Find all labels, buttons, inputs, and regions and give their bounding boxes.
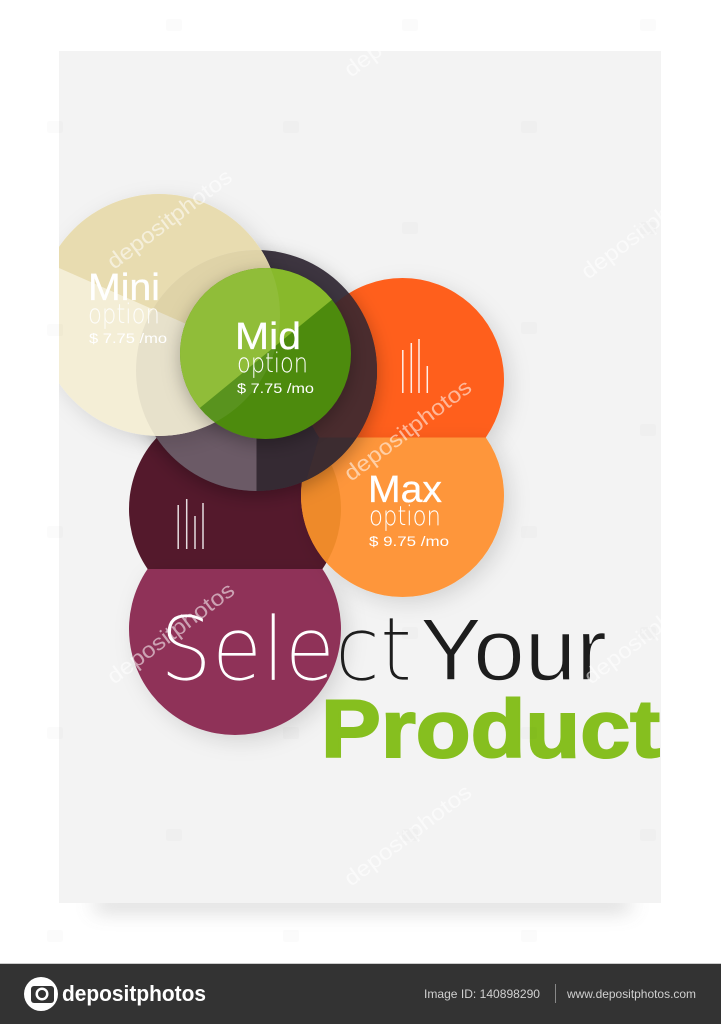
circle: maroon top	[129, 403, 341, 569]
label: max option	[368, 469, 449, 549]
watermarks	[102, 0, 714, 891]
title: product: Product	[321, 684, 660, 775]
watermarks: depositphotos	[102, 164, 237, 274]
footer bar	[0, 963, 721, 1024]
title: select your: Your	[420, 600, 607, 699]
circle: orange top	[301, 278, 504, 438]
logo text: depositphotos	[62, 981, 206, 1006]
label: mini option: option	[88, 299, 160, 330]
watermarks: depositphotos	[579, 579, 714, 689]
label: max option: Max	[368, 469, 442, 511]
label: max option: option	[369, 501, 441, 532]
website: www.depositphotos.com	[566, 987, 696, 1001]
watermark camera marks	[47, 19, 656, 942]
label: mid option: Mid	[235, 316, 301, 358]
title: select your: Select	[160, 598, 412, 701]
icon: camera logo	[24, 977, 58, 1011]
watermarks: depositphotos	[339, 779, 476, 891]
circle: mini beige	[59, 194, 271, 446]
label: mini option: Mini	[88, 267, 160, 309]
icon: bars on orange circle	[403, 339, 427, 393]
label: mid option	[235, 316, 314, 396]
watermarks: depositphotos	[576, 172, 713, 284]
circle: max orange	[301, 437, 516, 609]
watermarks: depositphotos	[339, 374, 476, 486]
label: mini option	[88, 267, 167, 346]
label: mid option: option	[237, 348, 308, 379]
title: select your	[168, 613, 605, 681]
label: mini option: $ 7.75 /mo	[89, 330, 167, 346]
circle: dark ring	[141, 245, 387, 499]
circle: mid green	[171, 264, 352, 448]
circle: purple bottom	[129, 569, 341, 735]
image id: Image ID: 140898290	[424, 987, 540, 1001]
label: max option: $ 9.75 /mo	[369, 533, 449, 549]
label: mid option: $ 7.75 /mo	[237, 380, 314, 396]
background panel	[59, 51, 661, 910]
icon: bars on maroon circle	[178, 499, 203, 549]
title: select your: Select	[160, 598, 412, 701]
watermarks: depositphotos	[102, 577, 239, 689]
